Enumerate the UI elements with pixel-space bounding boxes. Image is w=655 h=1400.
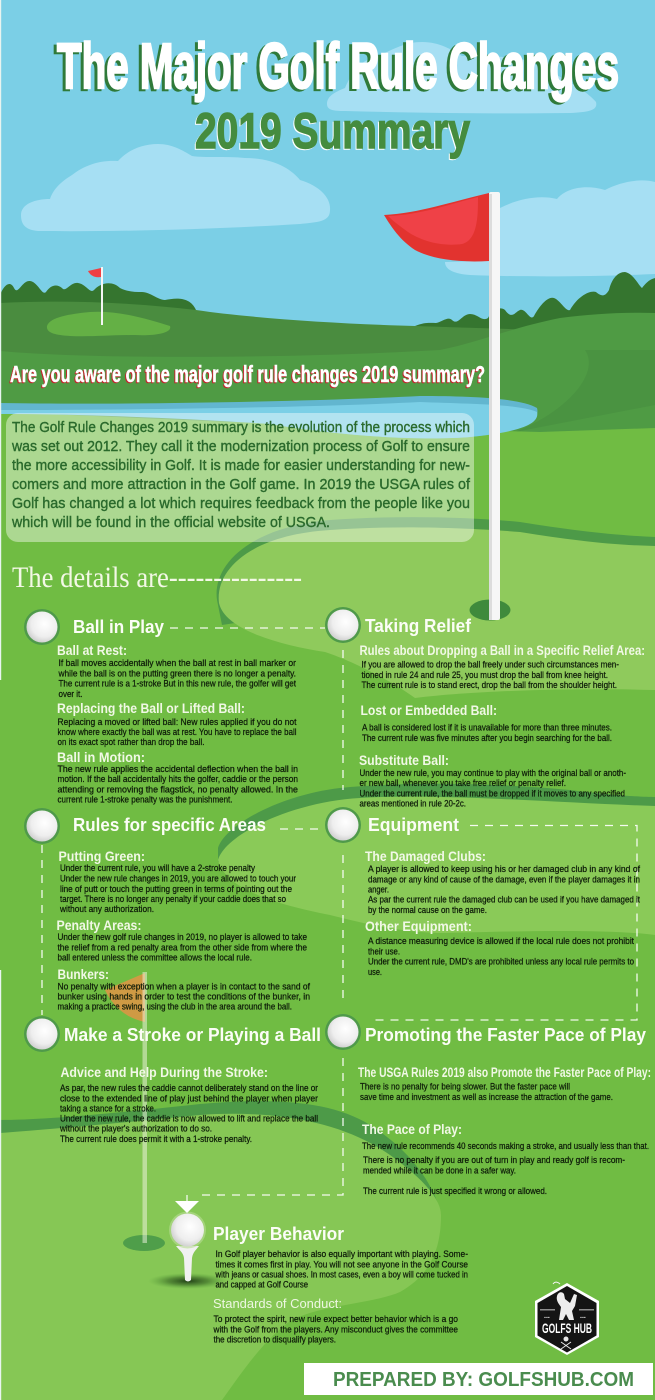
text block [59, 863, 296, 915]
text block: areas mentioned in rule 20-2c. [360, 798, 466, 810]
section: Promoting the Faster Pace of Play [325, 1014, 651, 1197]
text block [58, 658, 296, 700]
text block: use. [368, 967, 382, 978]
text block: bunker using hands in order to test the conditions of the bunker, in [58, 992, 310, 1002]
text block: The current rule is to stand erect, drop the ball from the shoulder height. [362, 680, 617, 691]
text block: current rule 1-stroke penalty was the punishment. [58, 794, 232, 806]
text block: The current rule is just specified it wrong or allowed. [363, 1186, 547, 1197]
text block [362, 1141, 649, 1197]
big flag hole [470, 600, 510, 620]
text block: ball entered unless the committee allows the local rule. [58, 952, 252, 964]
big flag [384, 193, 489, 261]
subheading: Advice and Help During the Stroke: [60, 1065, 268, 1080]
ground: left hill [0, 302, 655, 445]
text block [362, 722, 612, 744]
section: Player Behavior [148, 1201, 468, 1346]
icon: golf ball [24, 609, 60, 645]
subheading: Lost or Embedded Ball: [360, 703, 497, 718]
text block: Under the new rule changes in 2019, you are allowed to touch your [60, 874, 296, 884]
text block: anger. [368, 884, 389, 896]
text block [362, 660, 619, 691]
cloud behind title [327, 42, 596, 113]
text block: save time and investment as well as increase the attraction of the game. [360, 1092, 613, 1103]
text block: the relief from a red penalty area from the other side from where the [58, 942, 307, 954]
big flag pole [489, 192, 500, 620]
subtitle: 2019 Summary [195, 103, 470, 159]
second flag hole [123, 1235, 165, 1251]
text block: know where exactly the ball was at rest. You have to replace the ball [58, 727, 296, 738]
text block: A ball is considered lost if it is unavailable for more than three minutes. [362, 722, 612, 734]
text block [368, 936, 634, 978]
logo: Golfs Hub: ... [580, 1313, 586, 1320]
subheading: Ball in Motion: [57, 750, 145, 765]
heading: Taking Relief [365, 615, 472, 636]
heading: Equipment [368, 814, 459, 835]
ground: right hill [0, 313, 655, 440]
intro text: Golf has changed a lot which requires feedback from the people like you [12, 495, 470, 512]
text block: To protect the spirit, new rule expect better behavior which is a go [214, 1314, 458, 1325]
text block: on its exact spot rather than drop the ball. [58, 737, 204, 748]
text block: There is no penalty for being slower. But the faster pace will [360, 1082, 570, 1092]
intro panel [6, 413, 474, 542]
left edge strip [0, 0, 1, 1400]
text block: the discretion to disqualify players. [214, 1334, 336, 1346]
ground: corner shade [515, 350, 655, 432]
heading: Rules for specific Areas [73, 814, 266, 835]
footer: prepared by [304, 1363, 653, 1395]
text block: target. There is no longer any penalty if your caddie does that so [60, 894, 286, 905]
fairway top [217, 517, 655, 698]
icon: golf ball [24, 1016, 60, 1052]
text block: In Golf player behavior is also equally important with playing. Some- [216, 1249, 468, 1260]
fairway middle [218, 784, 655, 935]
text block [215, 1249, 468, 1290]
text block: their use. [368, 946, 400, 958]
icon: golf ball [24, 808, 60, 844]
text block: without any authorization. [59, 904, 154, 915]
text block: over it. [58, 689, 82, 700]
subheading: Penalty Areas: [56, 918, 142, 933]
subheading: Standards of Conduct: [213, 1296, 342, 1311]
intro text: comers and more attraction in the Golf game. In 2019 the USGA rules of [12, 476, 471, 493]
footer: prepared by: PREPARED BY: GOLFSHUB.COM [333, 1369, 634, 1391]
text block: with jeans or casual shoes. In most cases, even a boy will come tucked in [215, 1270, 468, 1280]
text block: with the Golf from the players. Any misconduct gives the committee [213, 1324, 458, 1336]
intro text: which will be found in the official website of USGA. [11, 514, 330, 531]
small flag [88, 267, 103, 325]
text block [360, 768, 626, 810]
text block [58, 932, 307, 964]
text block: er new ball, whenever you take free relief or penalty relief. [360, 778, 566, 789]
text block: Under the current rule, you will have a 2-stroke penalty [60, 863, 255, 874]
text block: by the normal cause on the game. [368, 905, 487, 916]
intro text [11, 419, 471, 531]
logo: Golfs Hub: ... [544, 1313, 550, 1320]
cloud left [21, 144, 330, 231]
subheading: Substitute Ball: [359, 753, 449, 768]
text block: As par, the new rules the caddie cannot deliberately stand on the line or [60, 1083, 318, 1094]
logo: Golfs Hub: GOLFS HUB [542, 1320, 592, 1336]
text block: attending or removing the flagstick, no penalty allowed. In the [58, 784, 298, 796]
icon: golf ball [325, 1014, 361, 1050]
text block: tioned in rule 24 and rule 25, you must drop the ball from knee height. [362, 670, 608, 681]
trees right [415, 272, 655, 340]
subheading: The Pace of Play: [362, 1122, 462, 1137]
text block: mended while it can be done in a safer way. [363, 1166, 516, 1176]
text block: Under the new rule, the caddie is now allowed to lift and replace the ball [60, 1114, 318, 1124]
subheading: Replacing the Ball or Lifted Ball: [57, 701, 245, 716]
fairway bottom [0, 1101, 441, 1400]
icon: golf ball [325, 807, 361, 843]
icon: tee shadow [148, 1273, 228, 1289]
text block: No penalty with exception when a player is in contact to the sand of [58, 982, 310, 992]
section: Make a Stroke or Playing a Ball [24, 1016, 321, 1145]
text block: line of putt or touch the putting green in terms of pointing out the [60, 884, 292, 895]
subheading: Bunkers: [58, 967, 109, 982]
cloud right [445, 180, 655, 276]
heading: Player Behavior [213, 1223, 344, 1244]
text block: without the player's authorization to do so. [59, 1124, 212, 1134]
text block: motion. If the ball accidentally hits the golfer, caddie or the person [58, 774, 298, 785]
text block [368, 864, 640, 916]
section: Rules for specific Areas [24, 808, 310, 1012]
text block: The current rule is a 1-stroke But in this new rule, the golfer will get [58, 678, 296, 690]
icon: golf ball [325, 607, 361, 643]
text block: close to the extended line of play just behind the player when player [60, 1094, 318, 1104]
main green field [0, 412, 655, 1400]
section: Ball in Play [24, 609, 298, 806]
subheading: The Damaged Clubs: [365, 849, 486, 864]
second flag translucent [105, 972, 147, 1243]
icon: golf ball on tee [169, 1212, 206, 1248]
text block [58, 764, 298, 806]
details heading: The details are--------------- [12, 561, 302, 594]
text block: The new rule applies the accidental deflection when the ball in [58, 764, 298, 775]
text block [59, 1083, 318, 1145]
icon: golf tee [176, 1246, 199, 1282]
section: Taking Relief [325, 607, 645, 810]
text block: Under the new golf rule changes in 2019, no player is allowed to take [58, 932, 307, 943]
text block: making a practice swing, using the club in the area around the ball. [58, 1002, 292, 1012]
text block: If ball moves accidentally when the ball at rest in ball marker or [58, 658, 296, 669]
subheading: Putting Green: [58, 849, 145, 864]
dashed connectors [42, 628, 637, 1201]
subheading: Other Equipment: [365, 919, 472, 934]
text block: Replacing a moved or lifted ball: New rules applied if you do not [58, 717, 297, 728]
text block: The current rule does permit it with a 1-stroke penalty. [60, 1134, 252, 1145]
text block: The current rule was five minutes after you begin searching for the ball. [362, 733, 612, 744]
water hazard [0, 396, 537, 438]
text block: while the ball is on the putting green there is no longer a penalty. [58, 668, 296, 680]
intro text: was set out 2012. They call it the modernization process of Golf to ensure [11, 438, 470, 455]
intro text: The Golf Rule Changes 2019 summary is the evolution of the process which [12, 419, 470, 436]
text block [213, 1314, 458, 1346]
background: sky [0, 0, 655, 440]
text block: taking a stance for a stroke. [60, 1104, 156, 1114]
intro text: the more accessibility in Golf. It is made for easier understanding for new- [12, 457, 470, 474]
logo: Golfs Hub [535, 1282, 599, 1355]
text block [58, 982, 310, 1012]
subheading: Ball at Rest: [57, 643, 127, 658]
text block [58, 717, 297, 748]
trees left [0, 281, 196, 325]
icon: pointer triangle [175, 1201, 199, 1213]
heading: Ball in Play [73, 616, 165, 637]
text block: times it comes first in play. You will not see anyone in the Golf Course [216, 1260, 468, 1270]
text block: and capped at Golf Course [216, 1280, 308, 1290]
small putting green [47, 312, 170, 336]
text block [360, 1082, 613, 1103]
heading: Make a Stroke or Playing a Ball [64, 1024, 321, 1045]
section: Equipment [325, 807, 640, 978]
